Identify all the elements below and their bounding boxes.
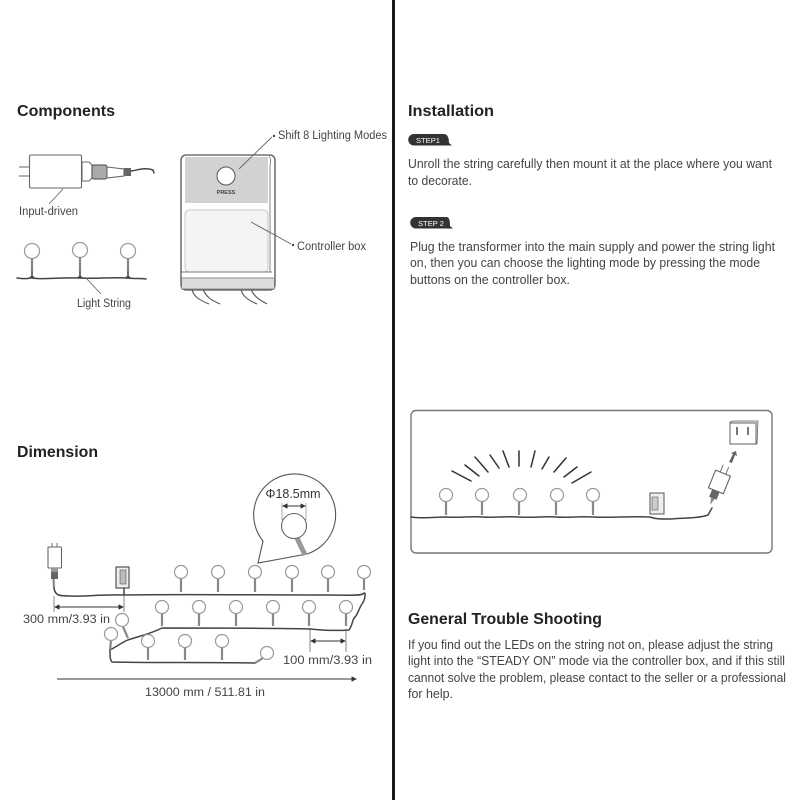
text: step 1: to decorate. bbox=[408, 174, 472, 188]
icon: input-driven plug bbox=[19, 155, 154, 204]
panel: installation illustration bbox=[411, 410, 772, 553]
icon: controller box: PRESS bbox=[217, 190, 236, 196]
callout: bulb diameter: Φ18.5mm bbox=[266, 487, 320, 501]
text: trouble shooting: If you find out the LEDs on the string not on, please adjust the string bbox=[408, 638, 773, 652]
icon: arrow to socket bbox=[729, 451, 737, 463]
badge: STEP 2: STEP 2 bbox=[418, 219, 444, 228]
icon: plug bbox=[48, 543, 62, 588]
dimension: 300 mm: 300 mm/3.93 in bbox=[23, 614, 110, 626]
icon: light string bbox=[17, 242, 146, 294]
text: trouble shooting: for help. bbox=[408, 687, 453, 701]
wires bbox=[54, 588, 365, 663]
label: Shift 8 Lighting Modes: Shift 8 Lighting Modes bbox=[278, 130, 387, 142]
controller bbox=[116, 567, 129, 588]
stems bbox=[446, 502, 593, 515]
label: Light String: Light String bbox=[77, 298, 131, 310]
text: step 2: on, then you can choose the lighting mode by pressing the mode bbox=[410, 256, 760, 270]
heading: Dimension: Dimension bbox=[17, 444, 98, 461]
bulbs row 3 bbox=[142, 634, 154, 648]
text: trouble shooting bbox=[408, 638, 786, 701]
dimension: 100 mm bbox=[283, 629, 372, 667]
icon: controller box bbox=[181, 135, 294, 304]
badge: STEP1 bbox=[408, 134, 452, 146]
dimension: total length: 13000 mm / 511.81 in bbox=[145, 687, 265, 699]
text: step 2: buttons on the controller box. bbox=[410, 273, 570, 287]
dimension: 100 mm: 100 mm/3.93 in bbox=[283, 655, 372, 667]
stems row 2 bbox=[110, 614, 346, 650]
text: step 2: Plug the transformer into the main supply and power the string light bbox=[410, 240, 776, 254]
heading: Components: Components bbox=[17, 103, 115, 120]
badge: STEP 2 bbox=[410, 217, 453, 228]
dimension: 300 mm bbox=[23, 596, 124, 626]
icon: controller bbox=[650, 493, 664, 514]
text: trouble shooting: light into the “STEADY ON” mode via the controller box, and if this still bbox=[408, 654, 785, 668]
icon: light rays bbox=[452, 451, 591, 483]
text: step 2 bbox=[410, 240, 776, 287]
label: Input-driven: Input-driven bbox=[19, 206, 78, 218]
bulbs row 2 bbox=[156, 600, 168, 614]
heading: General Trouble Shooting: General Trouble Shooting bbox=[408, 611, 602, 628]
label: Controller box: Controller box bbox=[297, 241, 366, 253]
bulbs row 1 bbox=[174, 566, 188, 578]
icon: bulbs bbox=[440, 488, 600, 502]
wire bbox=[411, 508, 712, 519]
text: step 1 bbox=[408, 157, 773, 188]
diagram: dimension light string bbox=[48, 543, 370, 663]
heading: Installation: Installation bbox=[408, 103, 494, 120]
text: step 1: Unroll the string carefully then mount it at the place where you want bbox=[408, 157, 773, 171]
callout: bulb diameter bbox=[254, 474, 336, 563]
icon: plug bbox=[703, 463, 733, 508]
badge: STEP1: STEP1 bbox=[416, 136, 440, 145]
icon: wall socket bbox=[730, 421, 758, 444]
stems row 1 bbox=[181, 579, 364, 592]
stems row 3 bbox=[148, 648, 263, 663]
text: trouble shooting: cannot solve the problem, please contact to the seller or a professional bbox=[408, 671, 786, 685]
